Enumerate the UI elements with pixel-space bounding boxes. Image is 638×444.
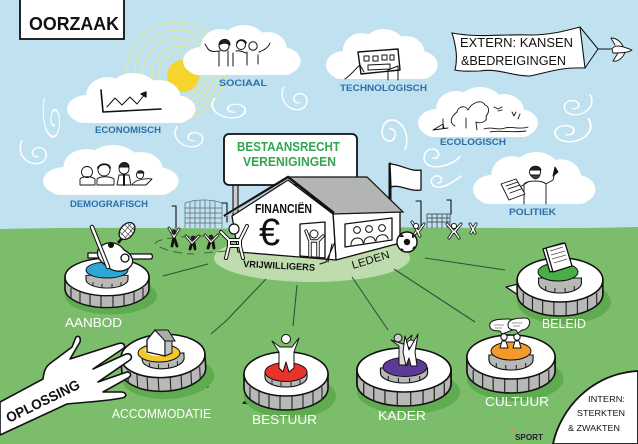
platform: bestuur — [243, 334, 336, 418]
swirls — [20, 87, 592, 187]
intern text: INTERN: — [588, 394, 625, 404]
door with volunteer — [300, 222, 325, 258]
icon: group of people — [205, 39, 270, 66]
icon: house — [147, 330, 175, 356]
title box: oorzaak — [20, 0, 124, 39]
label: aanbod: AANBOD — [65, 315, 122, 330]
billboard panel — [224, 134, 357, 185]
cloud: economisch — [67, 73, 195, 123]
hand: oplossing — [0, 336, 131, 435]
cloud: ecologisch — [418, 87, 538, 137]
label: cultuur: CULTUUR — [485, 394, 549, 409]
ground ellipse — [214, 234, 410, 282]
icon: speech bubbles and figures — [490, 318, 530, 348]
green base — [538, 263, 578, 281]
corner panel: intern: STERKTEN — [577, 408, 625, 418]
platform tip — [506, 284, 518, 295]
clubhouse — [224, 177, 403, 264]
football — [397, 232, 417, 252]
label: leden: LEDEN — [350, 249, 391, 272]
front wall — [232, 180, 336, 260]
path around the clubhouse — [155, 236, 226, 254]
corner panel: intern: & ZWAKTEN — [568, 423, 620, 433]
icon: trees, birds and water — [433, 102, 528, 132]
tow lines — [580, 27, 612, 68]
connector lines — [163, 258, 505, 334]
platform: kader — [357, 334, 460, 414]
side wall — [333, 212, 400, 260]
banner cloth — [452, 27, 585, 76]
text: financien: FINANCIËN — [255, 201, 312, 216]
icon: politician with document — [501, 166, 558, 204]
plane — [611, 38, 632, 61]
label: sociaal: SOCIAAL — [219, 78, 267, 89]
cloud: politiek — [473, 152, 595, 204]
billboard text: BESTAANSRECHT — [237, 140, 340, 154]
sun — [127, 22, 225, 120]
airplane banner — [452, 27, 632, 76]
label: bestuur: BESTUUR — [252, 412, 317, 427]
label: vrijwilligers: VRIJWILLIGERS — [243, 259, 315, 274]
label: ecologisch: ECOLOGISCH — [440, 137, 506, 148]
blue base — [86, 262, 128, 278]
logo: sport — [510, 429, 544, 442]
title box: oorzaak: OORZAAK — [29, 14, 119, 34]
lamp posts — [172, 200, 451, 228]
corner panel: intern — [553, 371, 638, 444]
platform: accommodatie — [120, 330, 215, 401]
billboard: VERENIGINGEN — [243, 155, 336, 169]
icon: documents — [543, 243, 572, 272]
small players on the left — [169, 228, 218, 249]
orange base — [491, 342, 531, 360]
purple base — [383, 358, 427, 376]
airplane banner: &BEDREIGINGEN — [461, 53, 566, 68]
label: demografisch: DEMOGRAFISCH — [70, 199, 148, 210]
label: technologisch: TECHNOLOGISCH — [340, 83, 427, 94]
icon: four people — [80, 162, 152, 185]
roof edge — [224, 177, 334, 216]
tip under platform — [192, 380, 208, 387]
left goal — [185, 200, 222, 228]
platform: beleid — [506, 243, 611, 324]
sky background — [0, 0, 638, 230]
label: politiek: POLITIEK — [509, 207, 556, 218]
volunteer waving — [221, 224, 247, 258]
label: accommodatie: ACCOMMODATIE — [112, 406, 211, 421]
billboard posts — [233, 184, 238, 218]
icon: two figures — [391, 334, 418, 366]
window with people — [345, 218, 392, 247]
label: beleid: BELEID — [542, 316, 586, 331]
grass background — [0, 227, 638, 444]
cloud: technologisch — [326, 29, 438, 80]
hockey stick and ball near the door — [320, 242, 335, 264]
platform: cultuur — [467, 318, 564, 401]
red base — [265, 362, 307, 382]
logo: sport: SPORT — [515, 432, 544, 442]
icon: rising line chart — [101, 90, 161, 112]
label: economisch: ECONOMISCH — [95, 125, 161, 136]
billboard — [224, 134, 357, 218]
banner text: EXTERN: KANSEN — [460, 35, 573, 50]
roof — [288, 177, 403, 214]
euro sign: € — [259, 212, 280, 254]
platform: aanbod — [65, 220, 157, 314]
flag — [388, 164, 392, 204]
text: oplossing: OPLOSSING — [3, 376, 82, 426]
label: kader: KADER — [378, 408, 426, 423]
small players on the right — [412, 222, 476, 238]
goals, lamps and flag — [172, 164, 451, 228]
yellow base — [138, 344, 180, 362]
icon: figure with raised arms — [272, 334, 299, 372]
right goal — [427, 214, 450, 228]
labels on ground ellipse — [243, 249, 391, 274]
icon: sports equipment — [88, 220, 152, 271]
icon: tablet with hands — [345, 49, 400, 80]
cloud: sociaal — [183, 25, 301, 75]
cloud: demografisch — [43, 145, 179, 195]
